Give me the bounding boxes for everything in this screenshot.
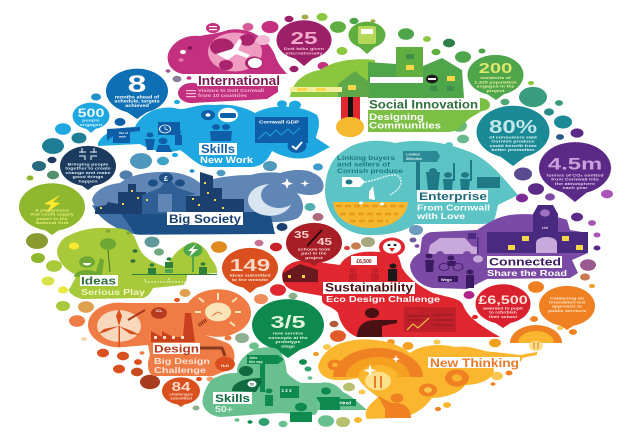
text: Designing Communities: Designing xyxy=(369,112,424,122)
text: Designing Communities: Communities xyxy=(369,120,441,130)
chart: Cornwall GDP: Cornwall GDP xyxy=(259,120,299,124)
text: Big Design Challenge: Big Design xyxy=(154,356,210,366)
bubble: 3/5 service concepts xyxy=(252,299,324,358)
bubble: bringing people together xyxy=(60,146,116,190)
signpost: jobs this way xyxy=(247,355,284,392)
city skyline: £ xyxy=(164,176,168,183)
bubble: 4.5m: each year xyxy=(563,186,588,191)
text: Eco Design Challenge: Eco Design Challenge xyxy=(326,294,440,304)
bubble: £6,500: their school xyxy=(489,315,517,319)
bubble: 500 people: engaged xyxy=(80,122,102,127)
label: Connected: Connected xyxy=(489,256,561,268)
pipe and drop: H₂O xyxy=(221,363,229,368)
person pointing xyxy=(378,393,411,418)
label: Skills xyxy=(213,392,252,405)
bubble: 8 months: months ahead of xyxy=(115,96,159,100)
bubble: 149 ideas: 149 xyxy=(230,255,270,275)
bubble: catalysing: Catalysing an xyxy=(550,296,584,300)
panel: Skills New Work xyxy=(98,105,330,167)
icon: smiling person xyxy=(74,256,104,277)
icon: no entry sign xyxy=(426,75,438,83)
bubble: £6,500 xyxy=(476,284,530,328)
panel: Skills 50+ xyxy=(202,347,367,422)
icon: factory xyxy=(151,313,195,342)
panel: report xyxy=(404,307,456,332)
panel: International xyxy=(168,23,287,103)
icon: rainbow xyxy=(333,348,423,377)
bubble: 500 people: people xyxy=(82,119,100,123)
bubble: 200 residents xyxy=(468,55,524,100)
signpost: jobs this way: Jobs xyxy=(249,356,257,360)
panel: Design xyxy=(88,289,251,376)
bubble: 149 ideas xyxy=(222,248,278,293)
bubble: 3/5 service concepts: 3/5 xyxy=(270,312,306,332)
bubble: 84 challenges: 84 xyxy=(172,381,191,394)
bubble: playground: A playground xyxy=(35,208,69,212)
bubble: 8 months xyxy=(106,69,168,119)
person: out of work: Out of xyxy=(119,131,128,135)
icon: school xyxy=(283,264,318,282)
panel: Social Innovation xyxy=(290,47,490,137)
bubble: catalysing xyxy=(539,286,595,330)
icon: gear and car xyxy=(201,108,238,122)
bubble: 35/45 schools: part in the xyxy=(301,251,327,256)
icon: idea bubble xyxy=(379,238,405,256)
text: Designing Communities xyxy=(369,112,441,130)
bubble: 8 months: schedule, targets xyxy=(114,99,160,104)
bubble: 8 months: achieved xyxy=(125,104,149,109)
text: linking buyers: Linking buyers xyxy=(337,156,396,162)
bubble: 80%: of consumers said xyxy=(489,136,537,140)
person teaching and chart xyxy=(265,386,299,406)
bubble: 35/45 schools: 45 xyxy=(317,236,332,248)
icon: pasty xyxy=(333,186,408,228)
signpost: jobs this way: this way xyxy=(249,360,263,364)
text: Share the Road: Share the Road xyxy=(487,268,567,278)
text: visitors: Visitors to Dott Cornwall xyxy=(198,88,264,93)
bubble: 80%: better promotion xyxy=(491,148,535,153)
signpost: London xyxy=(403,151,440,190)
person: 50: 50 xyxy=(250,382,254,386)
people cycling and walking xyxy=(425,253,474,288)
bubble: £6,500: £6,500 xyxy=(478,294,528,307)
text: Big Design Challenge xyxy=(154,356,210,375)
person: out of work: work xyxy=(118,134,126,138)
label: Sustainability: Sustainability xyxy=(325,282,414,294)
icon: lightbulb and stars xyxy=(364,355,400,390)
people and cheque xyxy=(349,256,397,281)
bubble: catalysing: innovation-led xyxy=(549,300,585,304)
icon: gears xyxy=(328,360,469,396)
people and cheque: £6,500 xyxy=(356,259,372,265)
bubble: 84 challenges xyxy=(162,377,200,407)
bubble: £6,500: awarded to pupil xyxy=(483,306,523,310)
person: 50 xyxy=(232,366,262,392)
people playing xyxy=(132,257,217,275)
bubble: 3/5 service concepts: new service xyxy=(273,332,303,336)
icon: price tag and chain xyxy=(342,175,401,195)
person: hired xyxy=(290,387,340,422)
bubble: 4.5m: 4.5m xyxy=(548,155,602,174)
bubble: phone icon xyxy=(348,22,386,54)
bubble: catalysing: public services xyxy=(548,308,586,313)
person presenting xyxy=(357,308,397,337)
panel: Enterprise xyxy=(325,141,518,235)
bubble: 200 residents: project xyxy=(486,89,505,94)
label: Design: Design xyxy=(154,344,199,356)
text: linking buyers: and sellers of xyxy=(337,162,391,168)
panel: Sustainability xyxy=(282,238,500,337)
bubble: £6,500: to refurbish xyxy=(489,310,517,315)
icon: wind turbine xyxy=(98,309,145,347)
bubble: 4.5m: the atmosphere xyxy=(555,182,596,187)
text: visitors: from 10 countries xyxy=(198,93,248,98)
text: linking buyers xyxy=(337,156,404,175)
people: trainers xyxy=(145,130,182,152)
text: linking buyers: Cornish produce xyxy=(337,169,404,175)
icon: CO2 xyxy=(151,307,167,319)
panel: Big Society xyxy=(92,170,324,235)
bubble: 149 ideas: ideas submitted xyxy=(229,274,271,278)
icon: lightbulb xyxy=(195,293,241,326)
label: Skills: Skills xyxy=(201,142,235,156)
bubble: 80% xyxy=(476,106,550,166)
bubble: 25 talks: Dott talks given xyxy=(284,47,324,52)
icon: check xyxy=(288,139,306,153)
building: university xyxy=(487,205,588,253)
bubble: catalysing: approach to xyxy=(552,304,582,309)
bubble: 84 challenges: challenges xyxy=(169,392,193,396)
pipe and drop xyxy=(200,348,235,371)
bubble: 35/45 schools xyxy=(286,223,342,266)
bubble: 3/5 service concepts: stage xyxy=(281,344,295,349)
label: Skills: Skills xyxy=(215,393,250,405)
person teaching and chart: 1 2 3 xyxy=(282,388,292,393)
bubble: 200 residents: residents of xyxy=(480,76,511,81)
icon: speech bubbles xyxy=(206,23,270,68)
panel: Connected: Wego xyxy=(441,277,452,282)
bubble: 35/45 schools: schools took xyxy=(298,247,330,251)
text: From Cornwall with Love: with Love xyxy=(416,211,465,221)
label: Social Innovation: Social Innovation xyxy=(369,98,478,112)
bubble: 35/45 schools: project xyxy=(305,256,323,260)
text: New Work: New Work xyxy=(200,155,254,165)
icon: moon xyxy=(248,178,310,216)
panel: report: Report xyxy=(408,310,420,314)
panel: Ideas xyxy=(57,228,217,299)
bubble: 200 residents: engaged in the xyxy=(476,84,515,89)
small rainbow and bulb xyxy=(510,325,562,351)
text: visitors xyxy=(198,88,264,98)
bubble: 80%: could benefit from xyxy=(489,144,537,149)
bubble: bringing people together: Bringing people xyxy=(67,163,109,167)
city skyline xyxy=(95,172,244,214)
people: shaking hands xyxy=(210,124,232,141)
tag: hired xyxy=(338,399,356,406)
label: New Thinking: New Thinking xyxy=(430,358,519,370)
icon: medal xyxy=(336,97,364,137)
bubble: 200 residents: 200 xyxy=(479,60,512,76)
text: Serious Play: Serious Play xyxy=(81,287,145,297)
label: Ideas: Ideas xyxy=(81,276,116,288)
panel: Connected xyxy=(410,205,588,289)
text: From Cornwall with Love: From Cornwall xyxy=(417,202,490,212)
panel: New Thinking xyxy=(318,325,562,419)
bubble: 4.5m: tonnes of CO₂ emitted xyxy=(547,174,603,178)
person: out of work xyxy=(107,118,140,143)
bubble: 500 people xyxy=(72,103,110,133)
text: Big Design Challenge: Challenge xyxy=(154,365,206,375)
bubble: bringing people together: happen xyxy=(78,179,98,184)
bubble: 149 ideas: to the website xyxy=(232,278,268,283)
bubble: 84 challenges: submitted xyxy=(170,396,193,400)
icon: CO2: CO₂ xyxy=(156,309,163,313)
bubble: playground: power to the xyxy=(36,217,68,221)
bubble: 8 months: 8 xyxy=(128,71,146,98)
bubble: 80%: 80% xyxy=(489,117,537,137)
icon: lightbulb balloon xyxy=(100,238,116,272)
tag: hired: Hired xyxy=(340,400,351,406)
text: 50+: 50+ xyxy=(215,404,233,414)
bubble: 25 talks xyxy=(276,20,332,66)
icon: car xyxy=(428,233,478,257)
label: Enterprise: Enterprise xyxy=(419,191,487,203)
label: Big Society: Big Society xyxy=(169,212,241,226)
bubble: playground: National Grid xyxy=(35,221,69,225)
bubble: 3/5 service concepts: concepts at the xyxy=(268,335,308,340)
bubble: 500 people: 500 xyxy=(78,106,105,119)
bubble: 35/45 schools: 35 xyxy=(294,229,309,241)
bubble: bringing people together: together to create xyxy=(65,166,111,171)
bubble: bringing people together: change and make xyxy=(65,171,111,176)
bubble: bringing people together: good things xyxy=(73,175,104,180)
label: International: International xyxy=(198,74,280,88)
icon: energy xyxy=(184,243,202,272)
bubble: 4.5m xyxy=(539,142,611,202)
bubble: 3/5 service concepts: prototype xyxy=(276,340,301,345)
bubble: playground: that could supply xyxy=(30,212,74,217)
signpost: London: London xyxy=(406,152,420,156)
chart: Cornwall GDP xyxy=(255,117,308,143)
signpost: London: 300miles xyxy=(406,157,422,161)
bubble: playground xyxy=(19,183,85,235)
bubble: 25 talks: 25 xyxy=(290,28,318,48)
building: university: Uni xyxy=(542,226,548,230)
text: From Cornwall with Love xyxy=(416,202,490,221)
people with fork and knife xyxy=(426,160,500,190)
icon: clock panel xyxy=(158,122,180,135)
bubble: 80%: Cornish produce xyxy=(491,139,535,144)
bubble: 200 residents: 1,325 population xyxy=(474,80,517,85)
bubble: 25 talks: internationally xyxy=(286,51,323,56)
bubble: 4.5m: from Cornwall into xyxy=(551,177,599,182)
